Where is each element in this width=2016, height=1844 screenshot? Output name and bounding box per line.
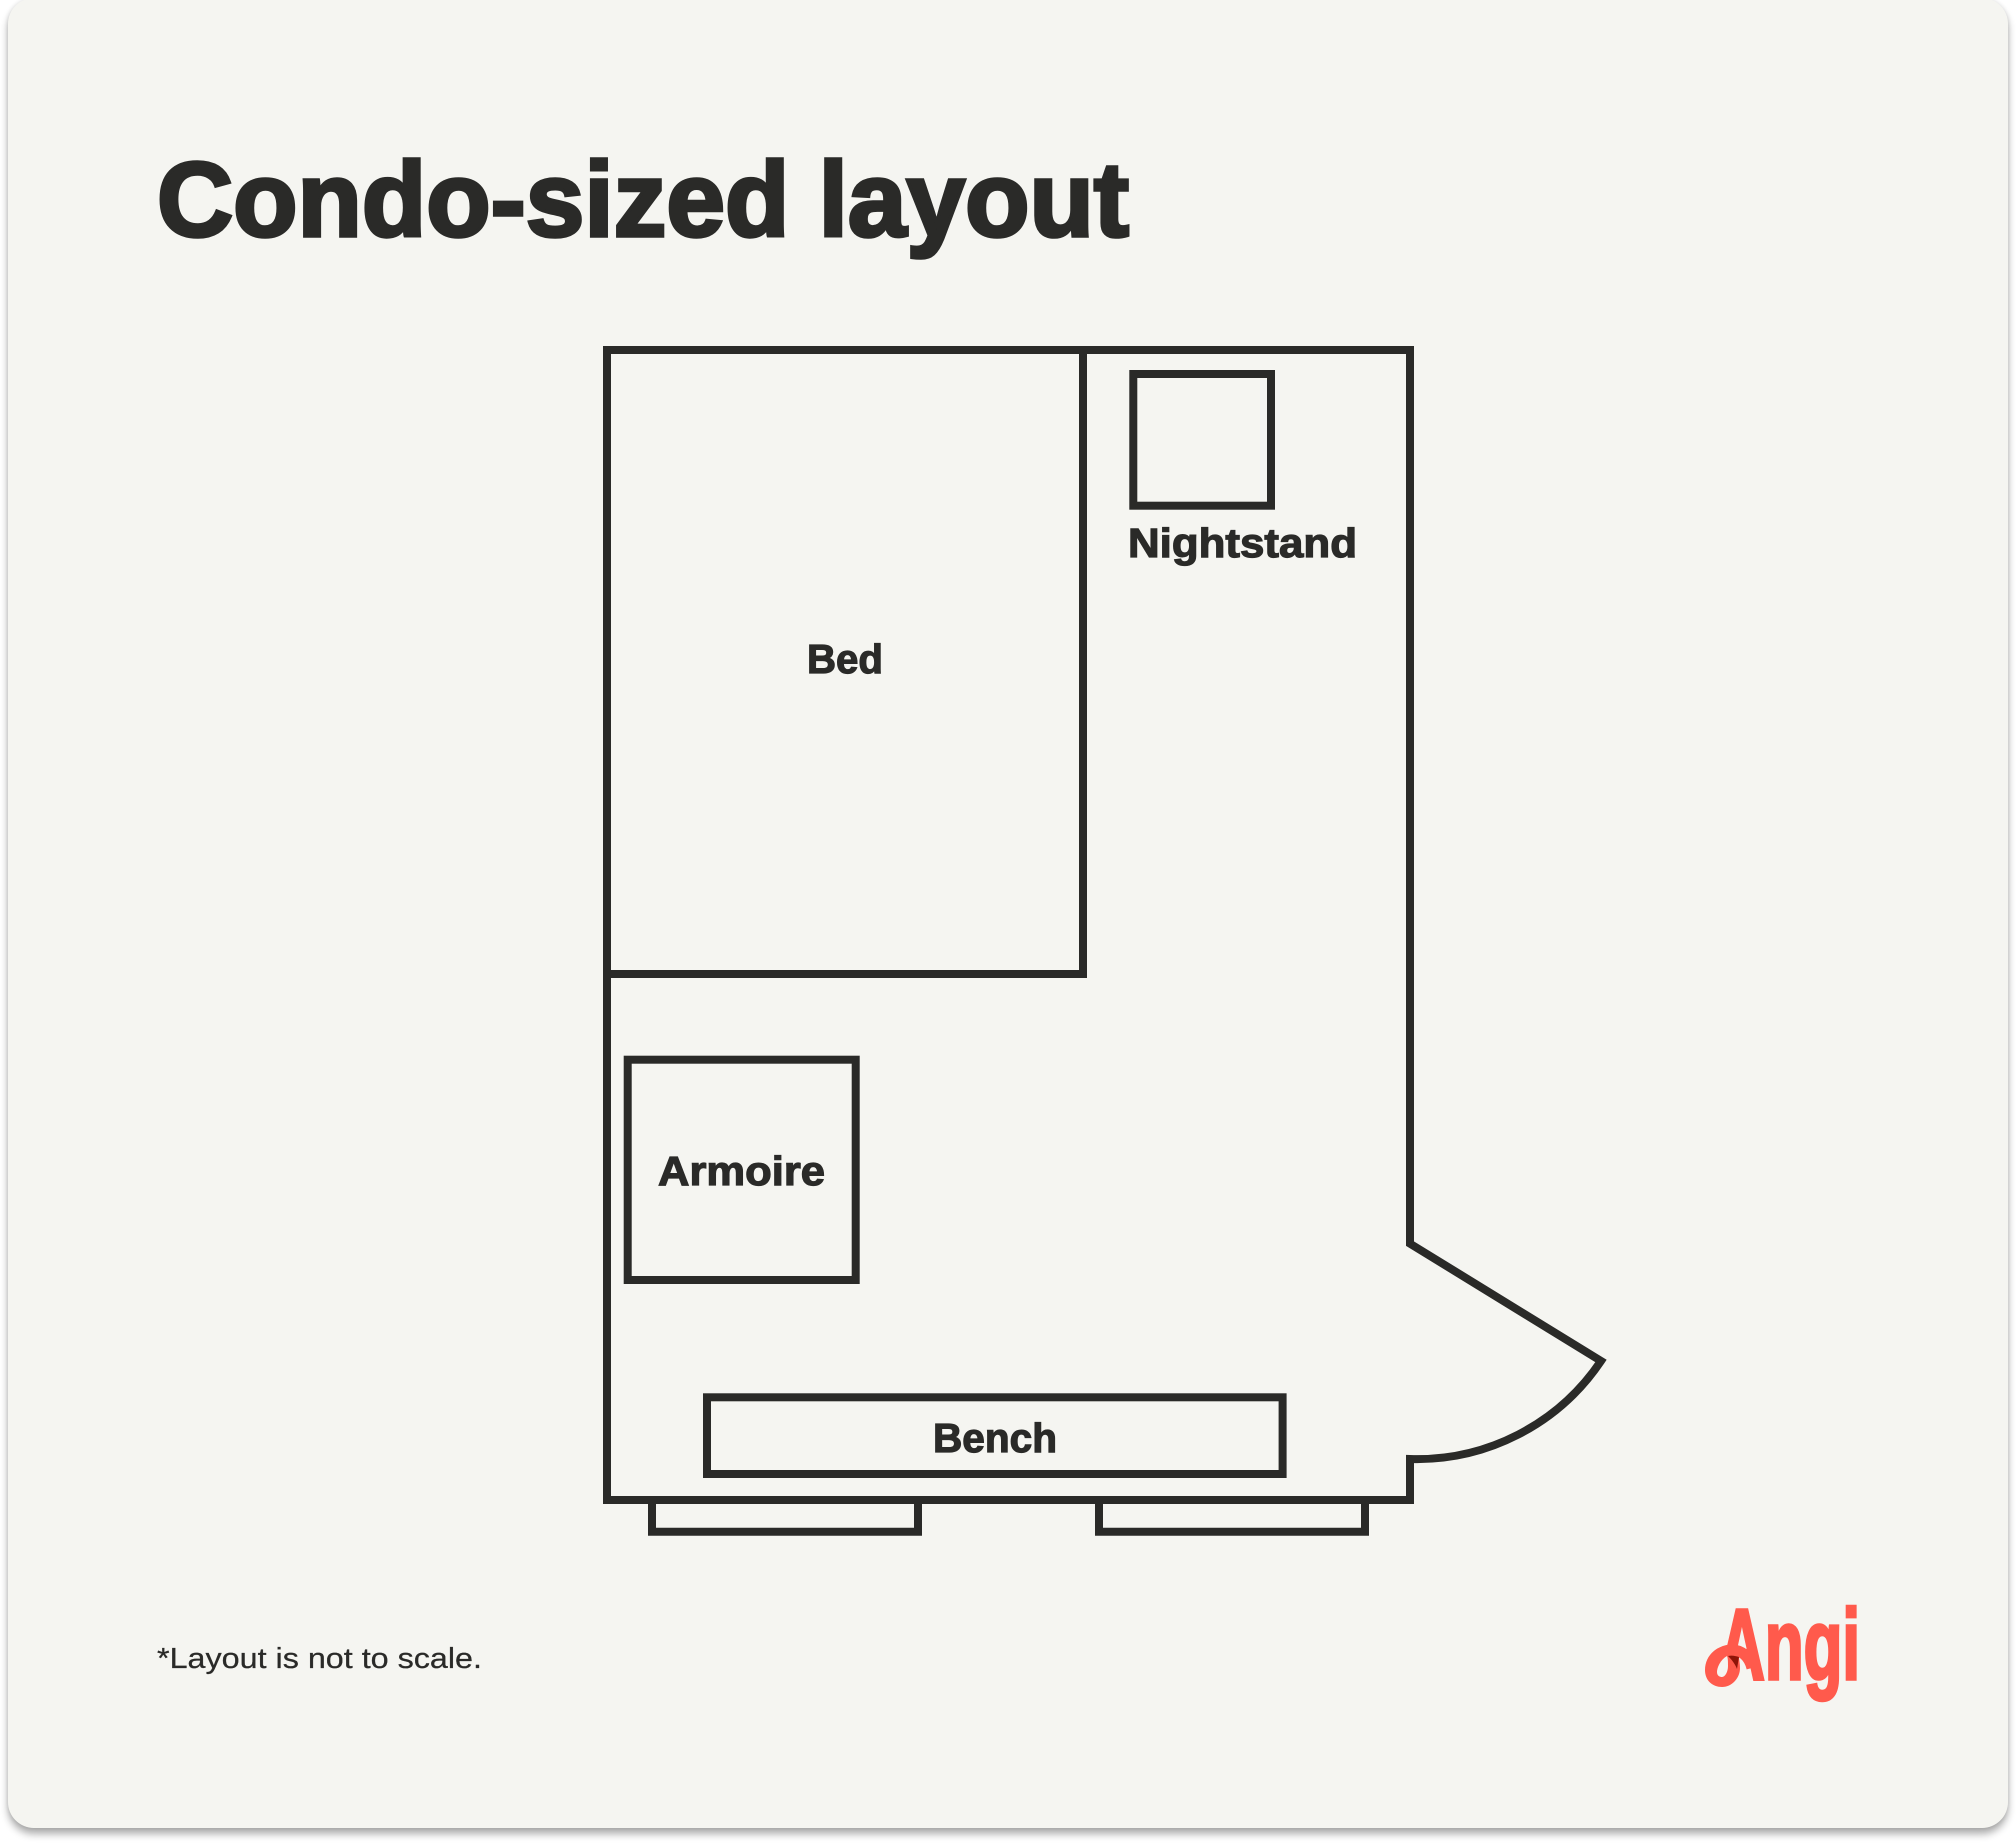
armoire: [628, 1060, 856, 1280]
bed: [607, 350, 1083, 974]
bench: [707, 1397, 1283, 1474]
nightstand: Nightstand: [1128, 520, 1357, 566]
logo: Angi: Angi: [1719, 1589, 1860, 1701]
logo: Angi: [1698, 1589, 1860, 1701]
nightstand: [1128, 374, 1357, 566]
floor plan: [607, 350, 1601, 1532]
window left: [652, 1500, 918, 1532]
room outline with door: [607, 350, 1601, 1500]
title: Condo-sized layout: [157, 141, 1129, 259]
bed: Bed: [807, 636, 883, 682]
footnote: *Layout is not to scale.: [157, 1643, 482, 1675]
armoire: Armoire: [658, 1148, 825, 1194]
window right: [1099, 1500, 1365, 1532]
bench: Bench: [933, 1415, 1057, 1461]
